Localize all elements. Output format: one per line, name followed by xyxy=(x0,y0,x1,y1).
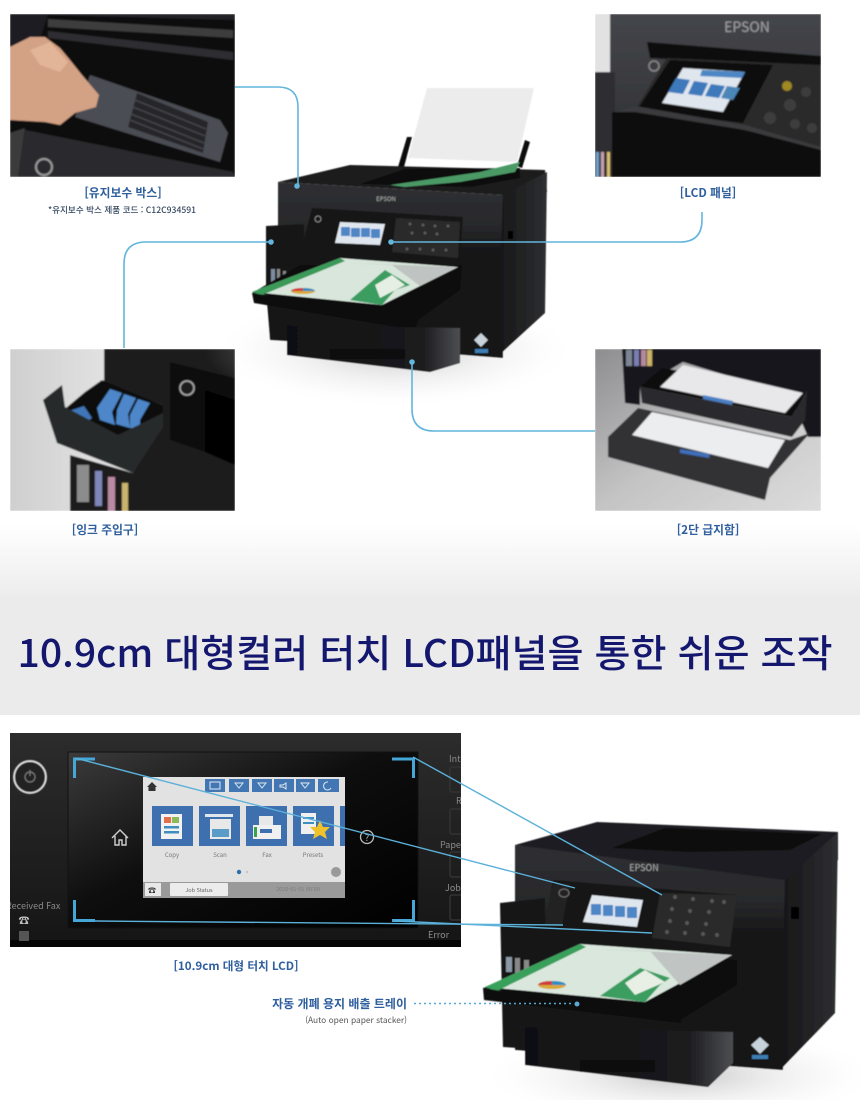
caption: large touch LCD: [10.9cm 대형 터치 LCD] xyxy=(174,958,298,974)
lower paper cassette xyxy=(525,1027,733,1087)
ink tank xyxy=(500,898,545,1050)
power button xyxy=(14,761,46,793)
bottom status bar: ☎ xyxy=(148,885,156,896)
side labels: R xyxy=(456,794,462,807)
print badge logo xyxy=(751,1037,769,1059)
top lid xyxy=(515,822,838,897)
side labels: Received Fax xyxy=(6,899,61,912)
front body xyxy=(515,845,785,1070)
printer right side xyxy=(497,172,547,357)
side labels: Int xyxy=(449,752,461,765)
printer top lid xyxy=(278,165,547,195)
presets icon xyxy=(293,806,334,846)
main printer image xyxy=(205,88,585,410)
bottom status bar: Job Status xyxy=(185,886,213,894)
fax icon: ☎ xyxy=(18,912,30,928)
touch screen UI xyxy=(143,777,348,898)
touch screen xyxy=(583,895,643,927)
blue corner brackets xyxy=(74,759,414,920)
bottom status bar: 2020-01-01 00:00 xyxy=(276,885,320,893)
home icon outline xyxy=(112,830,128,845)
caption: maintenance box: *유지보수 박스 제품 코드 : C12C934591 xyxy=(48,204,196,216)
page dots and next arrow xyxy=(237,867,341,877)
dotted leader to stacker xyxy=(414,1002,580,1006)
brand text: EPSON xyxy=(629,861,659,874)
photo: maintenance box xyxy=(10,14,235,177)
output tray with printed paper xyxy=(483,950,737,1020)
copy icon xyxy=(152,806,193,846)
LCD panel enlarged photo xyxy=(6,733,470,947)
photo: LCD panel closeup: EPSON xyxy=(724,17,770,37)
control panel xyxy=(302,208,463,260)
caption: two-tier paper cassette: [2단 급지함] xyxy=(677,521,739,538)
touch screen xyxy=(335,222,385,245)
screen bezel xyxy=(68,752,418,928)
help icon: ? xyxy=(365,831,369,844)
printer brand text: EPSON xyxy=(376,194,396,203)
second printer image xyxy=(470,822,860,1100)
tile labels xyxy=(165,852,323,858)
home glyph xyxy=(147,782,157,791)
side labels xyxy=(6,752,465,941)
ink tank xyxy=(266,224,304,342)
caption: maintenance box xyxy=(48,184,196,216)
tile labels: Presets xyxy=(303,850,323,859)
caption: auto open paper stacker xyxy=(272,995,407,1026)
lower paper cassette xyxy=(287,325,460,372)
tile labels: Copy xyxy=(165,850,180,859)
tile labels: Fax xyxy=(262,850,272,859)
output tray with printed paper xyxy=(252,265,462,320)
side labels: Job xyxy=(445,881,461,894)
caption: maintenance box: [유지보수 박스] xyxy=(84,184,162,201)
tile labels: Scan xyxy=(213,850,227,859)
print badge logo xyxy=(474,333,488,353)
help icon xyxy=(360,830,374,844)
photo: two-tier paper cassette xyxy=(595,349,821,511)
section heading: 10.9cm 대형컬러 터치 LCD패널을 통한 쉬운 조작 xyxy=(18,623,832,678)
bottom status bar xyxy=(143,882,345,898)
title band background xyxy=(0,598,860,715)
caption: ink filling port: [잉크 주입구] xyxy=(72,521,138,538)
caption: auto open paper stacker: 자동 개폐 용지 배출 트레이 xyxy=(272,995,407,1012)
printer front body xyxy=(278,182,503,358)
right side xyxy=(780,832,838,1070)
fax icon tile xyxy=(246,806,287,846)
zoom lines from LCD to printer xyxy=(75,757,662,933)
connector lines with dots xyxy=(124,87,702,431)
paper on rear feeder xyxy=(408,88,534,162)
side labels: Error xyxy=(428,928,450,941)
caption: auto open paper stacker: (Auto open paper stacker) xyxy=(305,1014,407,1026)
page background gradient xyxy=(0,525,860,598)
scan icon xyxy=(199,806,240,846)
side buttons xyxy=(449,766,461,921)
photo: LCD panel closeup xyxy=(595,14,821,177)
caption: LCD panel: [LCD 패널] xyxy=(680,184,736,201)
side labels: Paper xyxy=(440,838,465,851)
control panel xyxy=(545,880,737,947)
photo: ink filling port xyxy=(10,349,235,511)
status icons xyxy=(205,779,339,792)
